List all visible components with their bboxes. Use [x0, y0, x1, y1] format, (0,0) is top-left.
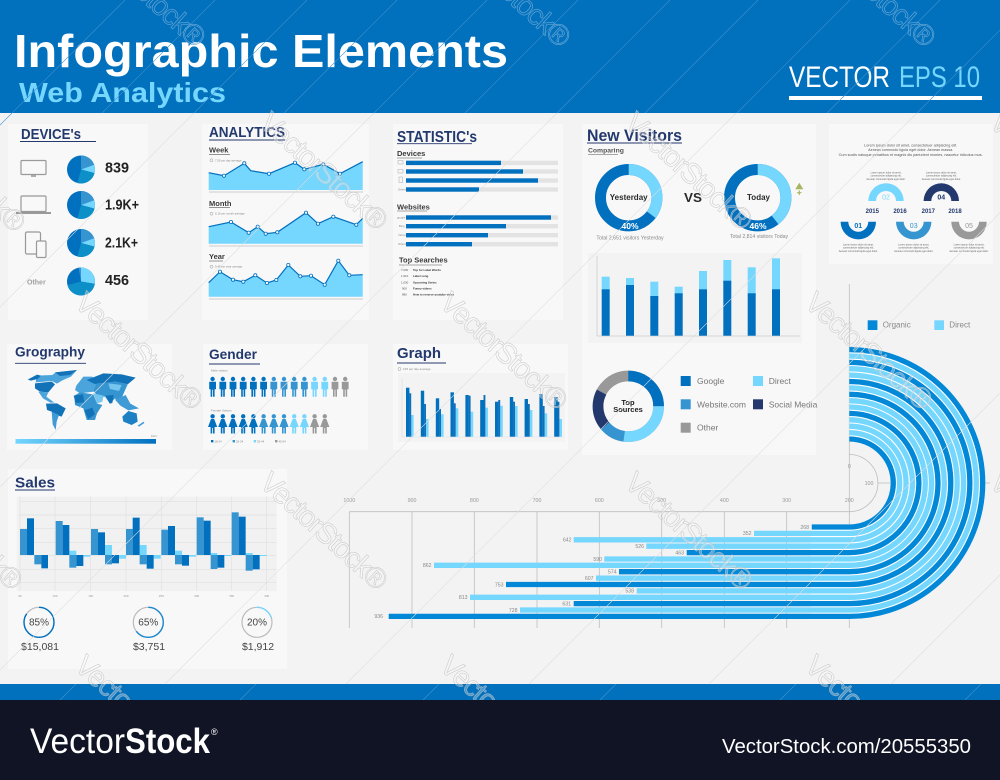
- text: VectorStock®: [253, 106, 394, 237]
- donut: today: Total 2,814 visitors Today: [730, 234, 788, 240]
- legend: organic and direct: [868, 320, 971, 330]
- text: VectorStock®: [798, 649, 939, 780]
- chart axes: [349, 284, 990, 628]
- bar chart: devices: Others: [398, 188, 407, 192]
- legend: top sources: Direct: [769, 376, 792, 386]
- panel: new visitors: [582, 124, 818, 455]
- legend: gender: 45-54: [278, 439, 286, 443]
- bar chart: devices: [397, 149, 558, 192]
- heading: graph: Graph: [397, 345, 441, 362]
- bar chart: websites: Yahoo: [398, 233, 406, 237]
- list: top searches: 1,910: [401, 274, 409, 278]
- text: VectorStock®: [798, 286, 939, 417]
- gauge: 65%: 65%: [138, 618, 158, 629]
- bar values: 936: [374, 614, 383, 620]
- axis labels: 700: [533, 498, 541, 504]
- bar chart: sales: 150: [88, 594, 94, 598]
- line chart: month: Month: [209, 199, 232, 208]
- bar chart: websites: google: [397, 216, 406, 220]
- bar values: 538: [625, 589, 634, 595]
- bar values: 352: [743, 531, 752, 537]
- value: 456: 456: [105, 272, 129, 289]
- years: 2018: [948, 209, 962, 215]
- legend: gender: [211, 439, 286, 443]
- bar chart: websites: [397, 202, 558, 246]
- bar values: 607: [585, 576, 594, 582]
- label: comparing: Comparing: [588, 148, 624, 155]
- radial bar chart: [343, 284, 990, 628]
- icon: tablet and phone: [26, 232, 46, 258]
- bar chart: sales: [17, 497, 277, 598]
- text: VectorStock®: [253, 466, 394, 597]
- legend: gender: 25-34: [236, 439, 244, 443]
- bar values: 862: [423, 563, 432, 569]
- white gaps between bars: [811, 394, 938, 572]
- arch 01: Aenean commodo ligula eget dolor.: [839, 250, 878, 253]
- text: VectorStock®: [68, 286, 209, 417]
- list: top searches: 7,600: [401, 268, 409, 272]
- list: top searches: Label song: [413, 274, 428, 278]
- gauge: 65%: [133, 607, 165, 653]
- donut: top sources: [598, 376, 659, 437]
- icon: monitor: [21, 160, 46, 176]
- title: Infographic Elements: Infographic Elements: [14, 25, 508, 77]
- bar values: 526: [635, 544, 644, 550]
- legend: organic and direct: Direct: [949, 320, 971, 330]
- arch 01: [839, 222, 878, 253]
- line chart: year: [209, 252, 363, 299]
- line chart: year: Year: [209, 252, 225, 261]
- value: 839: 839: [105, 160, 129, 177]
- heading: new visitors: New Visitors: [587, 127, 682, 145]
- gauge: 85%: 85%: [29, 618, 49, 629]
- bar chart: sales: 250: [159, 594, 164, 598]
- donut: yesterday: Yesterday: [610, 193, 648, 202]
- donut: today: Today: [747, 193, 771, 202]
- axis labels: [343, 464, 873, 504]
- value: 2.1K+: 2.1K+: [105, 234, 138, 252]
- world map: [28, 370, 144, 430]
- line chart: week: Week: [209, 146, 229, 154]
- label: vs: VS: [684, 190, 702, 205]
- legend: top sources: Social Media: [769, 400, 818, 410]
- list: top searches: 1,030: [401, 280, 409, 284]
- arch 02: consectetuer adipiscing elit,: [871, 175, 902, 178]
- line chart: month: 5.16 per month average: [215, 212, 245, 216]
- gradient scale: 10m: [151, 434, 157, 438]
- arch 03: [894, 222, 934, 253]
- bars: [389, 350, 983, 616]
- heading: geography: Grography: [15, 344, 85, 360]
- legend: top sources: Google: [697, 376, 725, 386]
- list: top searches: Top for Label Words: [413, 268, 441, 272]
- years: 2015: [866, 209, 880, 215]
- donut: yesterday: 40%: [621, 221, 639, 231]
- footer: [0, 700, 1000, 780]
- badge: Vector EPS 10: VECTOR: [789, 61, 890, 94]
- list: top searches: 880: [402, 292, 407, 296]
- gauge: 20%: $1,912: [242, 641, 274, 653]
- arch 05: consectetuer adipiscing elit,: [954, 247, 985, 250]
- text: VectorStock®: [618, 106, 759, 237]
- heading: analytics: ANALYTICS: [209, 124, 285, 141]
- arch 05: Lorem ipsum dolor sit amet,: [954, 243, 985, 246]
- axis labels: 900: [408, 498, 416, 504]
- text: VectorStock®: [68, 649, 209, 780]
- bar values: 574: [608, 570, 617, 576]
- arch 05: [949, 222, 989, 253]
- years: 2017: [922, 209, 936, 215]
- stacked bar chart: [588, 253, 802, 343]
- footer logo: Vector: [30, 722, 125, 761]
- note: daily average: 125 per day average: [403, 367, 431, 371]
- axis labels: 600: [595, 498, 604, 504]
- gradient scale: [16, 434, 157, 444]
- pie: monitor: [67, 156, 95, 184]
- bar values: 642: [563, 538, 572, 544]
- list: top searches: Top Searches: [399, 256, 448, 265]
- panel: gender: [203, 344, 368, 450]
- legend: organic and direct: Organic: [883, 320, 911, 330]
- arch 02: Aenean commodo ligula eget dolor.: [866, 178, 906, 181]
- gauge: 20%: [242, 607, 274, 653]
- pictogram: male visitors: Male visitors: [211, 368, 228, 372]
- intro text: Lorem ipsum dolor sit amet, consectetuer adipiscing elit.: [864, 144, 957, 148]
- legend: gender: 35-44: [257, 439, 265, 443]
- icon: laptop: [16, 196, 51, 213]
- panel: statistics: [393, 124, 563, 320]
- text: VectorStock®: [433, 286, 574, 417]
- list: top searches: [399, 256, 454, 296]
- legend: gender: 18-24: [214, 439, 222, 443]
- bar chart: devices: Devices: [397, 149, 425, 158]
- arch 04: Aenean commodo ligula eget dolor.: [922, 178, 961, 181]
- list: top searches: 900: [402, 287, 407, 291]
- legend: top sources: [681, 376, 818, 433]
- badge: Vector EPS 10: EPS 10: [899, 61, 980, 94]
- pictogram: male visitors: [209, 368, 349, 397]
- bar chart: websites: Bing: [399, 224, 405, 228]
- pictogram: female visitors: Female Visitors: [211, 409, 232, 413]
- gauge: 20%: 20%: [247, 618, 267, 629]
- arch 04: consectetuer adipiscing elit,: [926, 175, 957, 178]
- heading: gender: Gender: [209, 346, 258, 362]
- legend: top sources: Website.com: [697, 400, 746, 410]
- list: top searches: Funny videos: [413, 287, 432, 291]
- bar values: 753: [495, 582, 504, 588]
- arch 01: Lorem ipsum dolor sit amet,: [843, 243, 874, 246]
- footer logo: Stock: [125, 722, 210, 761]
- arch 03: 03: [910, 223, 918, 230]
- list: top searches: Upcoming Series: [413, 280, 437, 284]
- panel: graph: [393, 344, 568, 450]
- header band: [0, 0, 1000, 113]
- gauge: 85%: $15,081: [21, 641, 59, 653]
- gauge: 65%: $3,751: [133, 641, 165, 653]
- legend: top sources: Other: [697, 422, 718, 432]
- pie: laptop: [67, 191, 95, 219]
- intro text: Aenean commodo ligula eget dolor. Aenean massa.: [868, 148, 953, 152]
- pictogram: female visitors: [208, 409, 329, 434]
- arch 05: 05: [965, 223, 973, 230]
- arch 03: Lorem ipsum dolor sit amet,: [898, 243, 929, 246]
- axis labels: 500: [657, 498, 666, 504]
- heading: statistics: STATISTIC's: [397, 129, 477, 146]
- donut: yesterday: Total 2,651 visitors Yesterday: [596, 235, 664, 241]
- bar chart: websites: Others: [398, 242, 407, 246]
- list: top searches: How to reverse youtube video: [413, 292, 454, 296]
- footer logo: ®: [211, 727, 218, 737]
- grouped bar chart: [398, 373, 565, 442]
- badge: Vector EPS 10: [789, 61, 982, 100]
- blue strip: [0, 684, 1000, 700]
- line chart: year: 9,48 per year average: [215, 265, 243, 269]
- bar chart: sales: 50: [18, 594, 22, 598]
- years: 2016: [893, 209, 907, 215]
- text: VectorStock®: [618, 466, 759, 597]
- icon: up arrow plus: [795, 183, 803, 195]
- axis labels: 200: [845, 498, 854, 504]
- arch 01: consectetuer adipiscing elit,: [843, 247, 874, 250]
- arch 01: 01: [854, 223, 862, 230]
- years: [866, 209, 962, 215]
- footer url: VectorStock.com/20555350: [722, 736, 971, 758]
- axis labels: 300: [782, 498, 791, 504]
- arch 04: Lorem ipsum dolor sit amet,: [926, 171, 957, 174]
- donut: top sources: Sources: [613, 405, 643, 414]
- arch 03: consectetuer adipiscing elit,: [898, 247, 929, 250]
- line chart: week: 7.55 per day average: [215, 158, 242, 162]
- bar values: 463: [675, 550, 684, 556]
- heading: devices: DEVICE's: [21, 126, 81, 143]
- gauge: 85%: [21, 607, 59, 653]
- axis labels: 0: [848, 464, 851, 470]
- bar chart: websites: Websites: [397, 202, 430, 211]
- arch 02: Lorem ipsum dolor sit amet,: [871, 171, 902, 174]
- panel: timeline arches: [829, 124, 993, 264]
- panel: geography: [7, 344, 172, 450]
- bar chart: sales: 400: [264, 594, 270, 598]
- bar values: 813: [459, 595, 468, 601]
- arch 02: [866, 171, 906, 202]
- panel: analytics: [202, 124, 369, 320]
- pie: other: [67, 267, 95, 296]
- intro text: [839, 144, 983, 157]
- intro text: Cum sociis natoque penatibus et magnis dis parturient montes, nascetur ridiculus mus.: [839, 153, 983, 157]
- heading: sales: Sales: [15, 475, 55, 492]
- bar values: 590: [593, 557, 602, 563]
- bar chart: sales: 350: [229, 594, 235, 598]
- bar values: 268: [800, 525, 809, 531]
- donut: today: [730, 169, 788, 240]
- bar chart: sales: 100: [52, 594, 58, 598]
- axis labels: 800: [470, 498, 479, 504]
- bar values: 631: [562, 601, 571, 607]
- donut: top sources: Top: [621, 398, 635, 407]
- panel: sales: [8, 469, 287, 669]
- panel: devices: [8, 124, 148, 320]
- arch 04: 04: [937, 194, 945, 202]
- arch 02: 02: [882, 194, 890, 202]
- line chart: month: [209, 199, 363, 246]
- bar chart: sales: 200: [123, 594, 129, 598]
- arch 05: Aenean commodo ligula eget dolor.: [949, 250, 989, 253]
- axis labels: 400: [720, 498, 729, 504]
- line chart: week: [209, 146, 363, 192]
- value: 1.9K+: 1.9K+: [105, 196, 139, 214]
- axis labels: 100: [865, 481, 873, 487]
- arch 04: [922, 171, 961, 202]
- pie: tablet: [67, 229, 95, 257]
- bar values: [374, 525, 809, 620]
- footer logo: [30, 722, 218, 761]
- text: VectorStock®: [433, 649, 574, 780]
- label: other: Other: [27, 279, 46, 286]
- bar chart: sales: 300: [194, 594, 200, 598]
- donut: yesterday: [596, 169, 664, 241]
- bar values: 728: [509, 608, 518, 614]
- arch 03: Aenean commodo ligula eget dolor.: [894, 250, 934, 253]
- donut: today: 46%: [749, 221, 767, 231]
- axis labels: 1000: [343, 498, 355, 504]
- subtitle: Web Analytics: Web Analytics: [19, 77, 226, 108]
